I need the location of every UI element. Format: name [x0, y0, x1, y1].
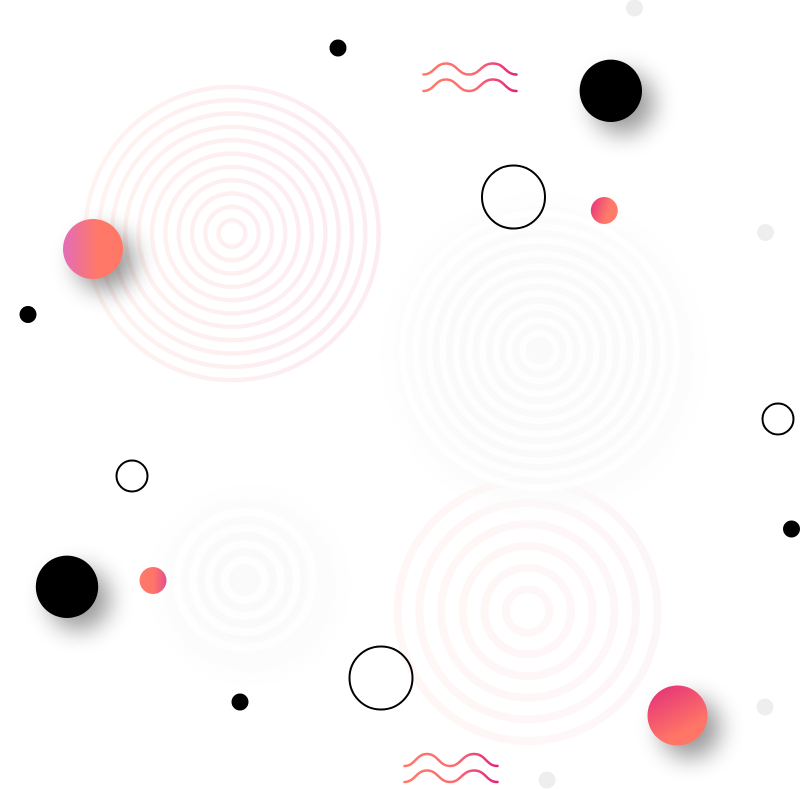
gradient ball left: [63, 219, 135, 291]
wavy lines bottom: [404, 754, 498, 782]
small gradient ball left: [140, 567, 166, 594]
light grey dots: [538, 0, 774, 788]
small gradient ball top: [591, 197, 618, 224]
pink concentric rings top left: [85, 87, 379, 380]
black ball with shadow top: [580, 60, 654, 134]
small grey soft rings: [161, 497, 337, 673]
outlined circles: [116, 166, 794, 710]
gradient ball bottom right: [648, 686, 720, 758]
wavy lines top: [424, 64, 516, 91]
black ball with shadow bottom left: [36, 556, 110, 630]
large grey soft rings: [394, 206, 694, 506]
pale pink concentric rings bottom right: [398, 481, 658, 741]
